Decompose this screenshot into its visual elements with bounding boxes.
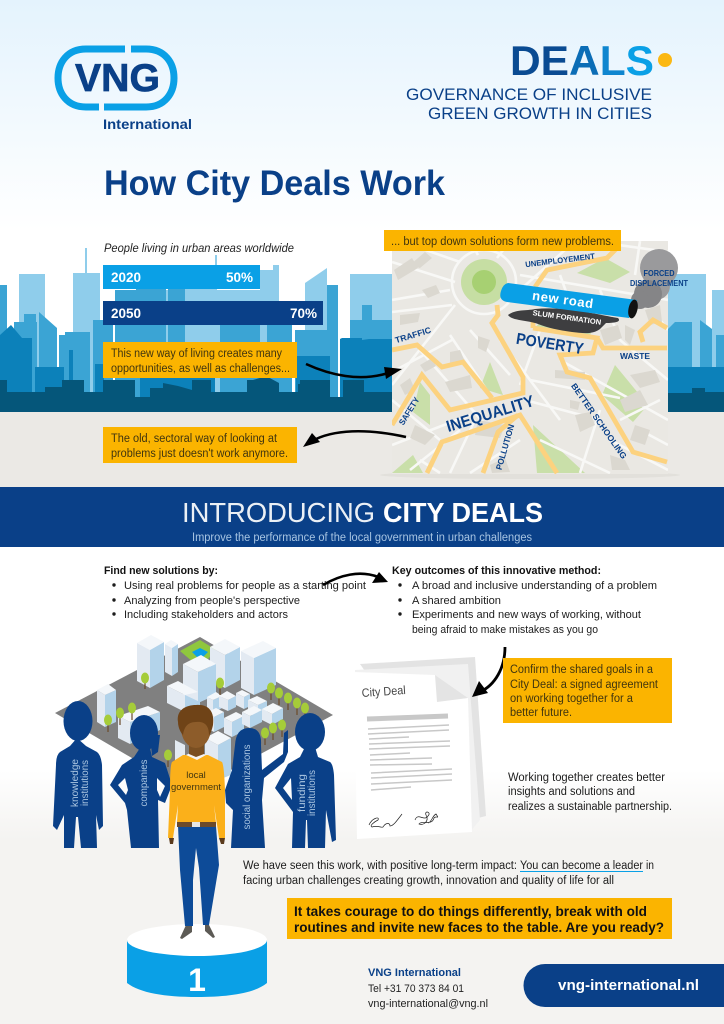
callout: confirm shared goals: on working together for a [510, 693, 634, 705]
text: key outcomes: A broad and inclusive understanding of a problem [412, 580, 657, 592]
callout: top down solutions [384, 230, 621, 251]
map labels: DISPLACEMENT [630, 279, 688, 288]
bar: 2020 50% [103, 265, 260, 289]
bar: 2050 70%: 70% [290, 306, 317, 321]
map labels: SAFETY [397, 395, 422, 427]
document lines [367, 716, 452, 790]
contact details: Tel +31 70 373 84 01 [368, 983, 464, 995]
logo: DEALS [406, 37, 672, 123]
logo: DEALS: GOVERNANCE OF INCLUSIVE [406, 86, 652, 104]
person: knowledge institutions [53, 701, 103, 848]
arrow: solutions to outcomes [323, 572, 388, 585]
ground band [0, 412, 724, 487]
map labels: UNEMPLOYEMENT [525, 252, 595, 269]
signatures [369, 812, 438, 827]
person: local government: government [171, 782, 221, 793]
caption: people living in urban areas: People living in urban areas worldwide [104, 243, 294, 255]
banner: CITY DEALS [383, 497, 543, 528]
callout: old sectoral way: The old, sectoral way of looking at [111, 433, 278, 445]
map labels: WASTE [620, 351, 650, 361]
new road pipe: new road [531, 288, 595, 311]
map labels: BETTER SCHOOLING [569, 381, 629, 461]
city deal document [354, 657, 486, 839]
text: long-term impact: We have seen this work, with positive long-term impact: [243, 860, 517, 872]
person: social organizations [225, 728, 288, 848]
text: long-term impact: in [646, 860, 654, 872]
pedestal [127, 924, 267, 998]
slum blob [508, 308, 619, 333]
callout: confirm shared goals: Confirm the shared goals in a [510, 664, 654, 676]
callout: confirm shared goals [503, 658, 672, 723]
map blocks [394, 252, 662, 473]
map shadow [380, 471, 680, 479]
park [180, 640, 216, 668]
bar: 2020 50%: 2020 [111, 270, 141, 285]
belt [177, 822, 216, 827]
document title: City Deal [361, 683, 406, 700]
banner [0, 487, 724, 547]
callout: it takes courage [287, 898, 672, 939]
person: knowledge institutions: institutions [80, 760, 91, 806]
logo: VNG International: International [103, 117, 192, 132]
text: key outcomes: being afraid to make mistakes as you go [412, 624, 598, 636]
callout: top down solutions: ... but top down solutions form new problems. [391, 236, 614, 248]
map circle park [461, 259, 507, 305]
shoes [180, 925, 215, 939]
logo: DEALS: GREEN GROWTH IN CITIES [428, 105, 652, 123]
callout: it takes courage: routines and invite new faces to the table. Are you ready? [294, 919, 664, 935]
map labels: TRAFFIC [394, 325, 432, 345]
website pill: vng-international.nl [558, 977, 699, 994]
contact details: VNG International [368, 967, 461, 979]
person: social organizations: social organizations [242, 744, 253, 830]
person: local government [168, 705, 225, 939]
small blocks [206, 690, 283, 737]
text: long-term impact: You can become a leader [520, 860, 643, 872]
callout: new way of living [103, 342, 297, 378]
map labels: POLLUTION [494, 423, 516, 471]
arrow: to map [306, 364, 402, 379]
text: find new solutions: Analyzing from people's perspective [124, 595, 300, 607]
logo: DEALS: DEALS [510, 37, 654, 84]
person: knowledge institutions: knowledge [70, 759, 81, 807]
smoke cloud [631, 249, 678, 309]
text: find new solutions: Find new solutions by: [104, 565, 218, 577]
callout: old sectoral way: problems just doesn't work anymore. [111, 448, 288, 460]
isometric city [55, 635, 333, 792]
map street grid [392, 241, 668, 473]
callout: confirm shared goals: better future. [510, 707, 572, 719]
map labels: SLUM FORMATION [532, 308, 602, 327]
person: companies [110, 715, 172, 848]
contact details: vng-international@vng.nl [368, 998, 488, 1010]
text: find new solutions: Including stakeholders and actors [124, 609, 288, 621]
text: key outcomes: A shared ambition [412, 595, 501, 607]
buildings [97, 635, 276, 780]
text: key outcomes: Key outcomes of this innovative method: [392, 565, 601, 577]
person: local government: local [186, 770, 206, 781]
text: working together [508, 772, 672, 813]
logo: VNG International [58, 49, 192, 132]
text: working together: insights and solutions and [508, 786, 635, 798]
text: long-term impact: facing urban challenges creating growth, innovation and quality of life for all [243, 875, 614, 887]
arrow: back to old way [303, 431, 406, 447]
text: key outcomes: Experiments and new ways of working, without [412, 609, 641, 621]
arms and sweater [168, 755, 225, 838]
logo: VNG International: VNG [75, 57, 160, 100]
map: city problems [392, 241, 688, 474]
person: funding institutions: institutions [307, 770, 318, 816]
callout: confirm shared goals: City Deal: a signed agreement [510, 679, 659, 691]
bar: 2020 50%: 50% [226, 270, 253, 285]
pedestal: 1 [188, 962, 206, 998]
bar: 2050 70% [103, 301, 323, 325]
banner: INTRODUCING [182, 497, 375, 528]
callout: new way of living: This new way of living creates many [111, 348, 282, 360]
collar [186, 750, 206, 760]
bar: 2050 70%: 2050 [111, 306, 141, 321]
text: find new solutions: Using real problems for people as a starting point [124, 580, 366, 592]
contact details [368, 967, 488, 1010]
trees [108, 683, 305, 767]
text: working together: realizes a sustainable partnership. [508, 801, 672, 813]
callout: it takes courage: It takes courage to do things differently, break with old [294, 903, 647, 919]
new road pipe [500, 283, 639, 319]
trousers [178, 826, 219, 926]
map labels: INEQUALITY [444, 393, 537, 436]
callout: old sectoral way [103, 427, 297, 463]
person: companies: companies [139, 760, 150, 806]
website pill [524, 964, 724, 1007]
map yellow roads [392, 248, 667, 473]
map labels: FORCED [644, 269, 675, 278]
text: key outcomes [392, 565, 657, 636]
text: working together: Working together creates better [508, 772, 665, 784]
title: How City Deals Work [104, 164, 446, 203]
person: funding institutions: funding [297, 774, 308, 812]
callout: new way of living: opportunities, as well as challenges... [111, 363, 290, 375]
banner: Improve the performance of the local government in urban challenges [192, 532, 532, 544]
text: long-term impact [243, 860, 654, 887]
skyline [0, 248, 724, 412]
map labels [394, 252, 688, 471]
head [189, 735, 204, 757]
map labels: POVERTY [515, 331, 585, 358]
person: funding institutions [275, 713, 336, 848]
text: find new solutions [104, 565, 366, 621]
map parks [392, 258, 648, 473]
arrow: outcomes to document [472, 647, 505, 697]
